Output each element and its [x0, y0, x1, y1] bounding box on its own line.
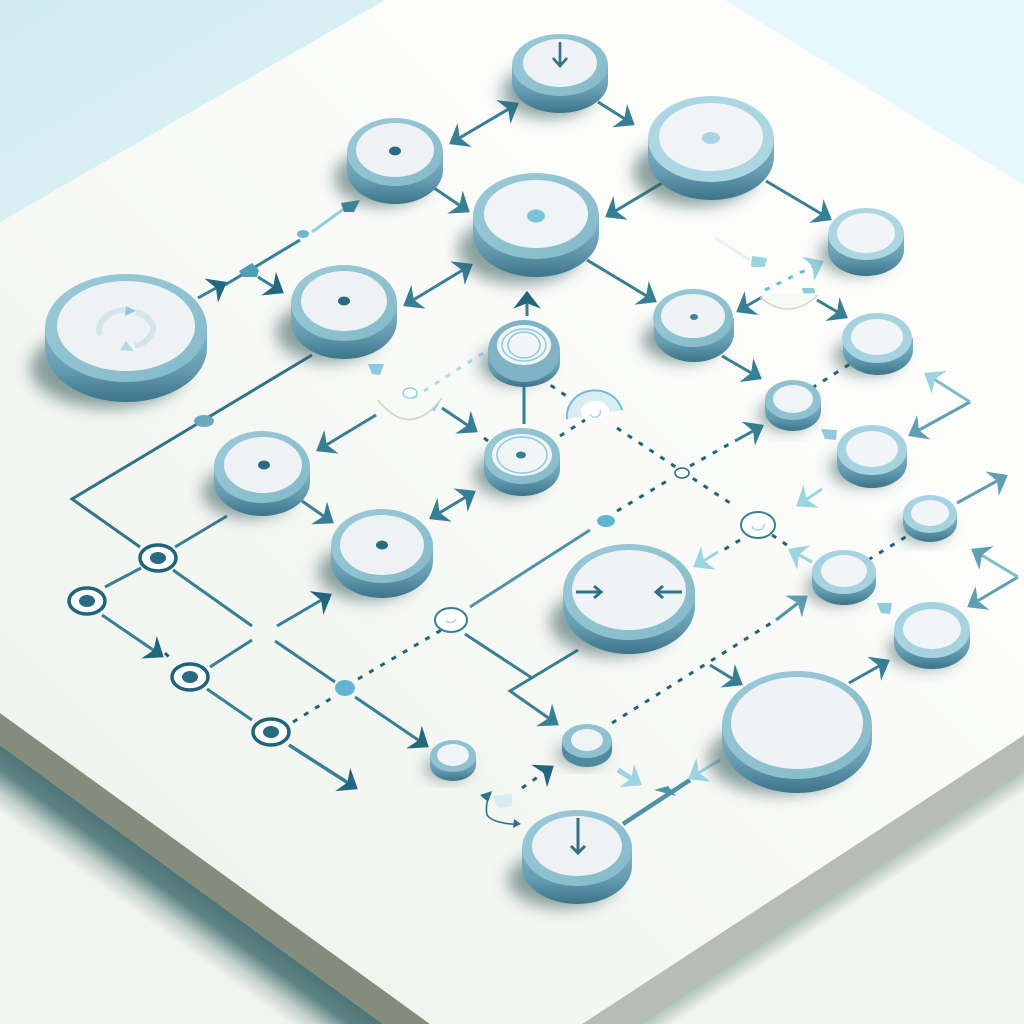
disc 23: bottom with down arrow: [508, 810, 632, 908]
connectors: dotted lines: [165, 364, 912, 788]
disc 16: [897, 495, 957, 542]
faint floating disc: left: [378, 388, 442, 420]
disc 15: [318, 509, 433, 600]
icon: down arrow: [553, 42, 567, 66]
bottom loop icon: [480, 791, 521, 828]
disc 13: target: [474, 428, 560, 497]
disc 22: [557, 724, 612, 767]
disc 8: [642, 289, 734, 362]
disc 2: [334, 118, 443, 206]
disc 9: [834, 313, 913, 375]
icon: inward arrows: [576, 586, 682, 598]
half disc icon: [567, 390, 622, 421]
connectors: dark arrows and lines: [72, 102, 1018, 824]
disc 18: [888, 602, 970, 669]
solid junction dots: [194, 200, 615, 696]
disc 20: largest: [708, 671, 872, 794]
icon: down arrow: [571, 818, 585, 853]
small open nodes: [435, 468, 775, 632]
disc 21: [425, 740, 476, 781]
disc 17: [806, 550, 876, 605]
disc 1: top: [502, 34, 608, 118]
disc 14: [202, 431, 310, 518]
disc 3: [633, 96, 774, 206]
disc 7: [276, 265, 397, 362]
disc 12: [830, 425, 907, 488]
disc 11: [759, 380, 821, 431]
disc 6: large left with cycle icon: [30, 274, 207, 408]
disc 19: compress icon: [550, 544, 695, 656]
icon: cycle: [99, 306, 153, 351]
disc 5: [820, 208, 904, 276]
disc 10: concentric: [480, 320, 560, 387]
faint floating disc: right: [760, 293, 818, 309]
disc 4: [458, 173, 599, 284]
connectors: pale arrows: [368, 238, 892, 784]
ring nodes: [69, 545, 289, 745]
